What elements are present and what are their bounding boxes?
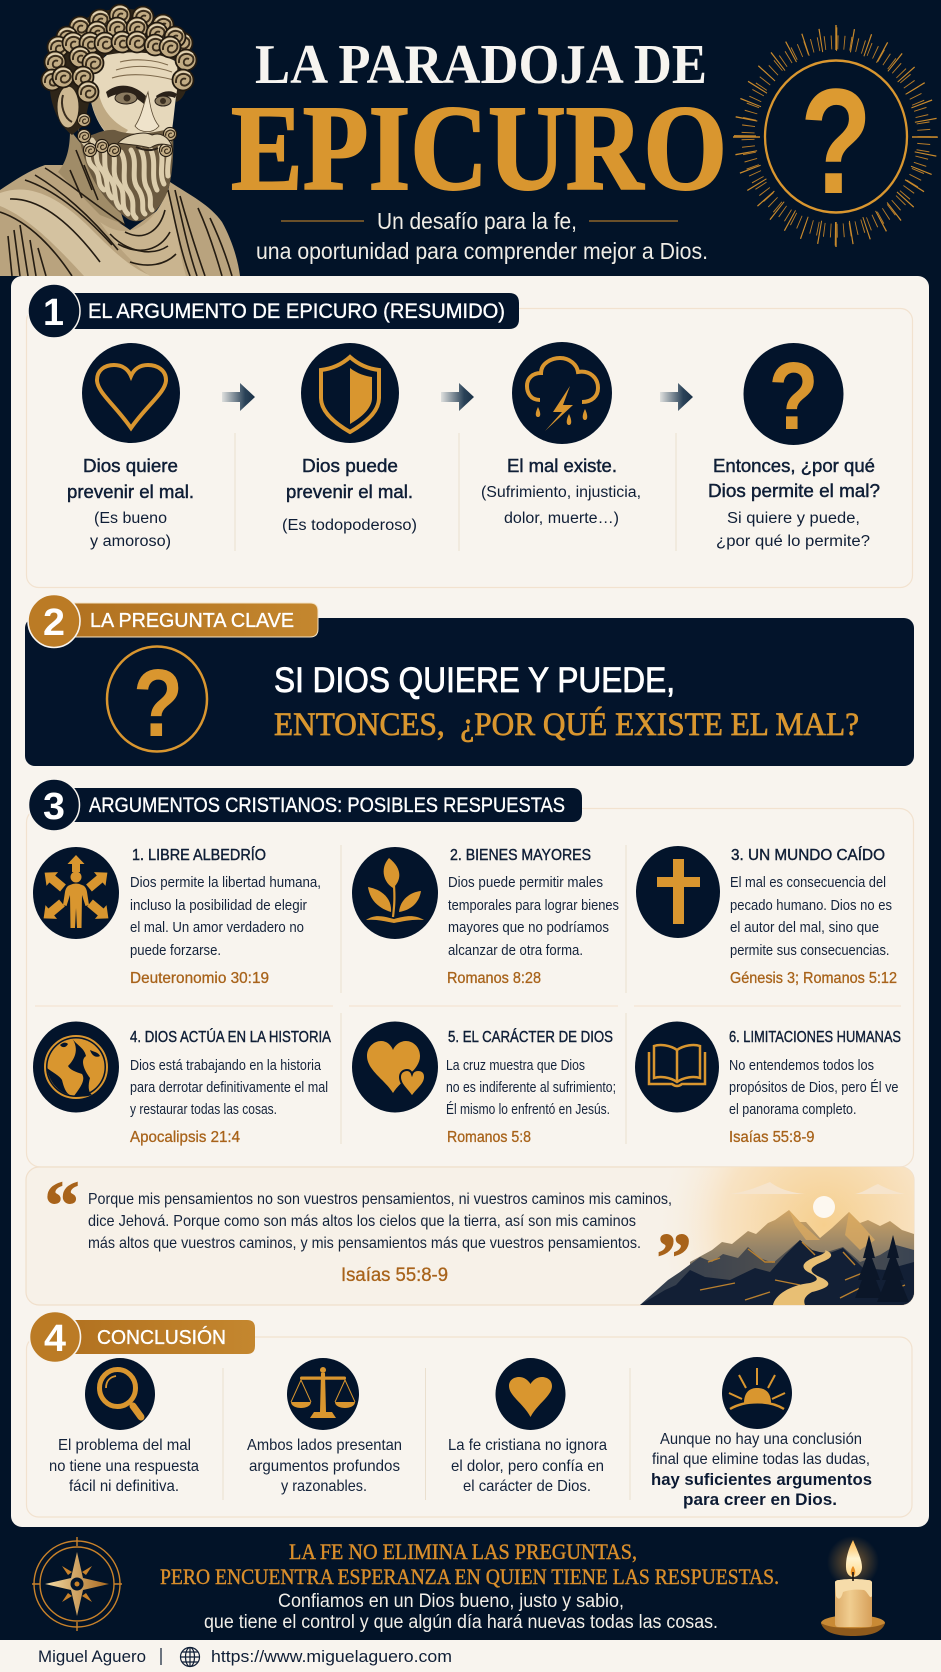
- subtitle: Un desafío para la fe,: [377, 208, 577, 234]
- quotation marks: “: [44, 1168, 80, 1245]
- card text: Dios está trabajando en la historia: [130, 1058, 322, 1074]
- conclusion text 2: Ambos lados presentan: [247, 1437, 402, 1454]
- icon: scales: [287, 1358, 359, 1430]
- text: then why: [708, 456, 880, 550]
- conclusion text 4: [651, 1431, 872, 1509]
- card text: 4. DIOS ACTÚA EN LA HISTORIA: [130, 1029, 332, 1046]
- text: evil exists: [481, 456, 641, 527]
- icon: question mark with sunburst: ?: [800, 57, 872, 225]
- credit bar: [0, 1640, 941, 1672]
- panel: section 2 key question: [25, 594, 914, 766]
- icon: compass: [32, 1537, 122, 1631]
- card text: 3. UN MUNDO CAÍDO: [731, 847, 885, 864]
- card text: propósitos de Dios, pero Él ve: [729, 1079, 898, 1096]
- card text: el mal. Un amor verdadero no: [130, 920, 304, 936]
- main panel: [11, 276, 929, 1527]
- icon: globe: [33, 1022, 119, 1112]
- icon: storm cloud: [512, 342, 612, 444]
- key question text: SI DIOS QUIERE Y PUEDE,: [274, 661, 675, 700]
- key question text: [274, 661, 859, 743]
- card text: [729, 1029, 901, 1146]
- conclusion text 4: Aunque no hay una conclusión: [660, 1431, 862, 1448]
- quote reference: Isaías 55:8-9: [341, 1264, 448, 1286]
- credit bar: Miguel Aguero: [38, 1647, 146, 1666]
- card: free will: [33, 847, 321, 987]
- text: evil exists: dolor, muerte…): [504, 510, 619, 527]
- text: God wants: [67, 456, 194, 550]
- card: character of God: [352, 1022, 616, 1146]
- arrow: [660, 383, 693, 411]
- icon: heart: [496, 1358, 566, 1430]
- text: God wants: (Es bueno: [94, 510, 167, 527]
- text: God wants: prevenir el mal.: [67, 482, 194, 502]
- card text: [447, 847, 619, 987]
- section frame: [26, 308, 912, 588]
- subtitle: una oportunidad para comprender mejor a Dios.: [256, 238, 708, 264]
- conclusion text 1: no tiene una respuesta: [49, 1458, 199, 1475]
- icon: heart: [82, 343, 180, 443]
- conclusion text 2: argumentos profundos: [249, 1458, 400, 1475]
- card text: y restaurar todas las cosas.: [130, 1102, 277, 1118]
- panel: section 3 christian arguments: [26, 779, 914, 1167]
- title: [231, 34, 727, 216]
- card text: temporales para lograr bienes: [448, 898, 619, 914]
- icon: question mark in ring: ?: [133, 650, 183, 757]
- icon: open book: [635, 1022, 719, 1112]
- card text: 2. BIENES MAYORES: [450, 847, 591, 864]
- closing message: PERO ENCUENTRA ESPERANZA EN QUIEN TIENE LAS RESPUESTAS.: [160, 1564, 779, 1589]
- quote text: Porque mis pensamientos no son vuestros pensamientos, ni vuestros caminos mis caminos,: [88, 1191, 672, 1208]
- icon: candle: [821, 1536, 885, 1636]
- conclusion text 3: [448, 1437, 607, 1495]
- subtitle: [256, 208, 708, 264]
- closing message: Confiamos en un Dios bueno, justo y sabio,: [278, 1591, 624, 1612]
- icon: question mark: ?: [768, 343, 818, 450]
- icon: two hearts: [352, 1022, 438, 1112]
- card text: Romanos 5:8: [447, 1129, 531, 1146]
- closing message: que tiene el control y que algún día hará nuevas todas las cosas.: [204, 1612, 718, 1633]
- text: God can: prevenir el mal.: [286, 482, 413, 502]
- heading: [30, 1312, 255, 1362]
- closing message: [160, 1539, 779, 1633]
- card text: Romanos 8:28: [447, 970, 541, 987]
- card text: puede forzarse.: [130, 943, 221, 959]
- icon: sprout: [352, 847, 438, 939]
- heading: 4: [44, 1318, 66, 1360]
- card text: incluso la posibilidad de elegir: [130, 898, 307, 914]
- icon: question mark in ring: [107, 646, 207, 757]
- card text: [130, 847, 321, 987]
- card text: el panorama completo.: [729, 1102, 856, 1118]
- card text: Isaías 55:8-9: [729, 1129, 815, 1146]
- card text: 1. LIBRE ALBEDRÍO: [132, 847, 266, 864]
- text: God can: Dios puede: [302, 456, 398, 476]
- quotation marks: ”: [656, 1220, 692, 1297]
- illustration: Epicurus bust: [0, 4, 240, 276]
- card: God acts in history: [33, 1022, 332, 1146]
- panel: scripture quote: [26, 1167, 914, 1305]
- card text: Génesis 3; Romanos 5:12: [730, 970, 897, 987]
- text: God can: [282, 456, 417, 534]
- text: God wants: Dios quiere: [83, 456, 178, 476]
- card text: Dios puede permitir males: [448, 875, 603, 891]
- card text: La cruz muestra que Dios: [446, 1058, 585, 1074]
- icon: sunrise: [722, 1357, 792, 1429]
- text: then why: ¿por qué lo permite?: [716, 533, 870, 550]
- card text: No entendemos todos los: [729, 1058, 874, 1074]
- icon: magnifying glass: [85, 1358, 155, 1430]
- conclusion text 3: el dolor, pero confía en: [451, 1458, 604, 1475]
- icon: question mark with sunburst: [733, 25, 937, 247]
- card text: el autor del mal, sino que: [730, 920, 879, 936]
- quote text: dice Jehová. Porque como son más altos los cielos que la tierra, así son mis caminos: [88, 1213, 636, 1230]
- card text: 6. LIMITACIONES HUMANAS: [729, 1029, 901, 1046]
- heading: EL ARGUMENTO DE EPICURO (RESUMIDO): [88, 300, 505, 323]
- icon: cross: [636, 846, 720, 938]
- conclusion text 4: hay suficientes argumentos: [651, 1470, 872, 1489]
- conclusion text 2: [247, 1437, 402, 1495]
- heading: 3: [43, 786, 65, 828]
- card text: El mal es consecuencia del: [730, 875, 886, 891]
- section frame: [26, 808, 914, 1167]
- panel: section 4 conclusion: [26, 1312, 912, 1517]
- conclusion text 1: [49, 1437, 199, 1495]
- card: human limits: [635, 1022, 901, 1146]
- conclusion text 3: el carácter de Dios.: [463, 1478, 591, 1495]
- text: evil exists: (Sufrimiento, injusticia,: [481, 484, 641, 501]
- card text: pecado humano. Dios no es: [730, 898, 892, 914]
- section frame: [26, 1337, 912, 1517]
- panel: section 1 argument: [26, 284, 912, 588]
- card text: [730, 847, 897, 987]
- heading: [28, 594, 318, 648]
- card text: Deuteronomio 30:19: [130, 970, 269, 987]
- credit bar: https://www.miguelaguero.com: [211, 1647, 452, 1666]
- header: [0, 4, 937, 276]
- card text: Dios permite la libertad humana,: [130, 875, 321, 891]
- heading: 1: [43, 292, 64, 334]
- heading: CONCLUSIÓN: [97, 1326, 226, 1349]
- conclusion text 1: fácil ni definitiva.: [69, 1478, 179, 1495]
- title: LA PARADOJA DE: [255, 34, 707, 96]
- icon: globe: [180, 1648, 200, 1666]
- card text: Él mismo lo enfrentó en Jesús.: [446, 1101, 610, 1118]
- heading: 2: [43, 602, 65, 644]
- conclusion text 1: El problema del mal: [58, 1437, 191, 1454]
- text: God wants: y amoroso): [90, 533, 171, 550]
- card text: 5. EL CARÁCTER DE DIOS: [448, 1029, 613, 1046]
- text: then why: Si quiere y puede,: [727, 510, 860, 527]
- card text: Apocalipsis 21:4: [130, 1129, 240, 1146]
- conclusion text 2: y razonables.: [281, 1478, 367, 1495]
- key question text: ENTONCES, ¿POR QUÉ EXISTE EL MAL?: [274, 706, 859, 743]
- closing message: LA FE NO ELIMINA LAS PREGUNTAS,: [289, 1539, 637, 1564]
- card: fallen world: [636, 846, 897, 987]
- heading: ARGUMENTOS CRISTIANOS: POSIBLES RESPUESTAS: [89, 794, 565, 817]
- footer band: [32, 1536, 885, 1636]
- card text: [446, 1029, 616, 1146]
- card: greater goods: [352, 847, 619, 987]
- arrow: [441, 383, 474, 411]
- text: then why: Entonces, ¿por qué: [713, 456, 875, 476]
- text: then why: Dios permite el mal?: [708, 481, 880, 501]
- card text: [130, 1029, 332, 1146]
- text: evil exists: El mal existe.: [507, 456, 617, 476]
- conclusion text 3: La fe cristiana no ignora: [448, 1437, 607, 1454]
- icon: person with arrows: [33, 847, 119, 939]
- card text: mayores que no podríamos: [448, 920, 609, 936]
- text: God can: (Es todopoderoso): [282, 517, 417, 534]
- heading: [28, 779, 582, 831]
- arrow: [222, 383, 255, 411]
- card text: no es indiferente al sufrimiento;: [446, 1080, 616, 1096]
- card text: para derrotar definitivamente el mal: [130, 1080, 328, 1096]
- icon: question mark: [744, 343, 844, 450]
- quote text: más altos que vuestros caminos, y mis pensamientos más que vuestros pensamientos.: [88, 1235, 641, 1252]
- title: EPICURO: [231, 81, 727, 216]
- card text: alcanzar de otra forma.: [448, 943, 583, 959]
- heading: LA PREGUNTA CLAVE: [90, 610, 294, 632]
- card text: permite sus consecuencias.: [730, 943, 890, 959]
- heading: [28, 284, 519, 338]
- icon: shield: [301, 343, 399, 443]
- quote text: [88, 1191, 672, 1252]
- quotation marks: [44, 1168, 692, 1297]
- conclusion text 4: para creer en Dios.: [683, 1490, 837, 1509]
- illustration: mountains at sunset: [620, 1167, 914, 1305]
- conclusion text 4: final que elimine todas las dudas,: [652, 1451, 870, 1468]
